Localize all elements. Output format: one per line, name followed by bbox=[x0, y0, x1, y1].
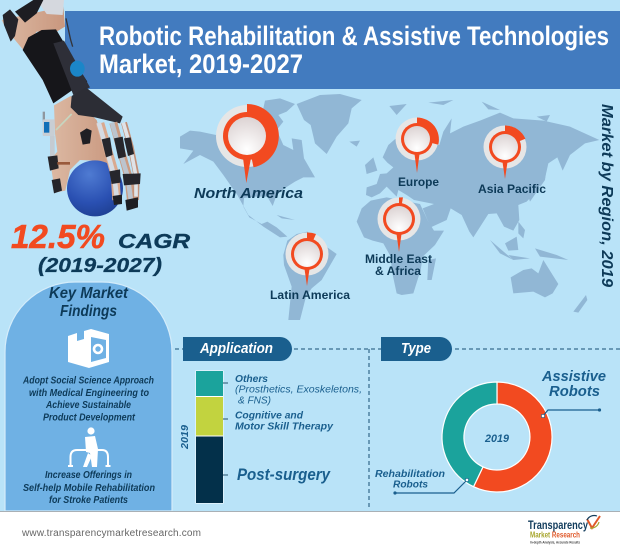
icon: box with gear bbox=[68, 329, 109, 368]
logo: In-depth Analysis, Accurate Results bbox=[530, 540, 581, 544]
donut chart: type: 2019 bbox=[484, 433, 510, 445]
stacked bar chart: application: 2019 bbox=[179, 425, 191, 450]
CAGR callout: (2019-2027) bbox=[38, 255, 162, 277]
application heading: Application bbox=[199, 341, 273, 357]
title banner: Market, 2019-2027 bbox=[99, 49, 303, 79]
type heading bbox=[381, 337, 452, 361]
icon: person with walker bbox=[68, 427, 110, 467]
bar labels: (Prosthetics, Exoskeletons, bbox=[235, 384, 362, 396]
bar labels: & FNS) bbox=[238, 396, 271, 406]
callout: assistive robots: Assistive bbox=[541, 368, 606, 385]
callout: assistive robots bbox=[541, 368, 606, 418]
region labels: Latin America bbox=[270, 290, 351, 302]
text: finding one: Achieve Sustainable bbox=[45, 400, 131, 411]
footer url: www.transparencymarketresearch.com bbox=[21, 528, 201, 539]
bar labels: Cognitive and bbox=[235, 410, 304, 422]
region labels: & Africa bbox=[375, 266, 422, 278]
text: finding one: Product Development bbox=[43, 412, 136, 424]
pin: Europe bbox=[396, 118, 439, 173]
stacked bar chart: application bbox=[179, 370, 228, 504]
pin: Latin America bbox=[286, 232, 328, 286]
CAGR callout: 12.5% bbox=[11, 218, 105, 255]
bar labels: Others bbox=[235, 373, 268, 385]
pin: Asia Pacific bbox=[484, 125, 526, 179]
bar labels: Post-surgery bbox=[237, 465, 331, 484]
text: finding one bbox=[22, 376, 154, 424]
panel: key market findings bbox=[5, 282, 172, 511]
region labels: Asia Pacific bbox=[478, 184, 547, 196]
callout: rehabilitation robots: Rehabilitation bbox=[375, 468, 445, 480]
CAGR callout: CAGR bbox=[118, 231, 191, 253]
region labels: Middle East bbox=[365, 254, 432, 266]
text: finding one: with Medical Engineering to bbox=[29, 388, 149, 399]
ball bbox=[67, 160, 123, 216]
CAGR callout bbox=[11, 218, 191, 277]
logo: Transparency bbox=[528, 518, 588, 532]
bar labels: Motor Skill Therapy bbox=[235, 420, 334, 432]
text: finding two: for Stroke Patients bbox=[49, 495, 128, 506]
bar labels bbox=[235, 373, 362, 484]
pin: North America bbox=[216, 104, 279, 183]
robotic hand photo bbox=[2, 0, 141, 216]
title banner bbox=[65, 11, 620, 89]
vertical heading: market by region: Market by Region, 2019 bbox=[598, 104, 615, 287]
world map bbox=[180, 94, 599, 320]
pin: Middle East and Africa bbox=[378, 197, 420, 252]
heading: key market findings: Findings bbox=[60, 303, 117, 320]
heading: key market findings bbox=[49, 285, 129, 320]
logo bbox=[528, 515, 600, 544]
heading: key market findings: Key Market bbox=[49, 285, 129, 302]
logo: Market Research bbox=[530, 530, 580, 540]
callout: assistive robots: Robots bbox=[549, 383, 600, 400]
region labels: North America bbox=[194, 185, 303, 202]
text: finding two bbox=[23, 470, 155, 506]
region labels: Europe bbox=[398, 177, 439, 189]
application heading bbox=[183, 337, 292, 361]
text: finding two: Self-help Mobile Rehabilitation bbox=[23, 483, 155, 494]
callout: rehabilitation robots: Robots bbox=[393, 478, 428, 490]
text: finding one: Adopt Social Science Approach bbox=[22, 376, 154, 386]
donut chart: type bbox=[442, 382, 552, 492]
footer bbox=[0, 511, 620, 548]
text: finding two: Increase Offerings in bbox=[45, 470, 132, 481]
callout: rehabilitation robots bbox=[375, 468, 468, 495]
type heading: Type bbox=[401, 340, 431, 357]
region labels bbox=[194, 177, 547, 302]
